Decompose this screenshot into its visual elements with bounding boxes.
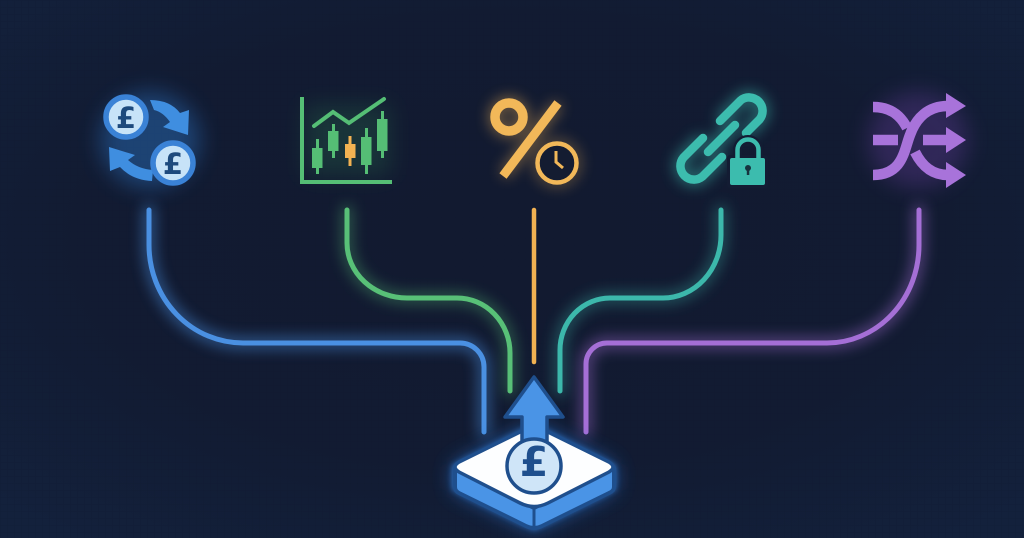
chart candlesticks	[312, 111, 388, 174]
connector: blue line from currency exchange to platform	[149, 210, 484, 432]
icon: shuffle arrows	[868, 92, 968, 188]
icon: candlestick chart	[302, 97, 392, 182]
icon part: bottom arrow	[109, 147, 153, 181]
platform side	[455, 468, 614, 528]
percent slash	[503, 103, 558, 176]
clock	[538, 144, 576, 182]
icon: percent sign with clock	[494, 102, 577, 183]
chart axes	[302, 97, 392, 182]
pound coin	[507, 438, 561, 493]
connector: teal line from locked link to platform	[560, 210, 721, 391]
platform top	[455, 428, 613, 506]
central platform with pound coin and up arrow	[455, 377, 614, 528]
icon part: bottom pound coin: £	[163, 147, 183, 181]
icon part: top arrow	[150, 100, 189, 135]
icon part: top pound coin: £	[116, 101, 136, 135]
percent ring	[495, 103, 523, 131]
connector: purple line from shuffle to platform	[586, 210, 919, 432]
icon: currency exchange coins	[100, 92, 200, 188]
chart trend line	[314, 99, 384, 126]
chain links	[680, 97, 763, 180]
shuffle arrowheads	[946, 93, 966, 188]
icon: chain link with padlock	[680, 97, 768, 188]
pound coin: £	[520, 438, 548, 486]
up arrow	[505, 377, 563, 448]
shuffle strands	[873, 106, 948, 175]
connector: green line from market chart to platform	[347, 210, 510, 391]
connector: orange line from interest rate to platform	[528, 210, 540, 362]
padlock	[727, 140, 768, 188]
